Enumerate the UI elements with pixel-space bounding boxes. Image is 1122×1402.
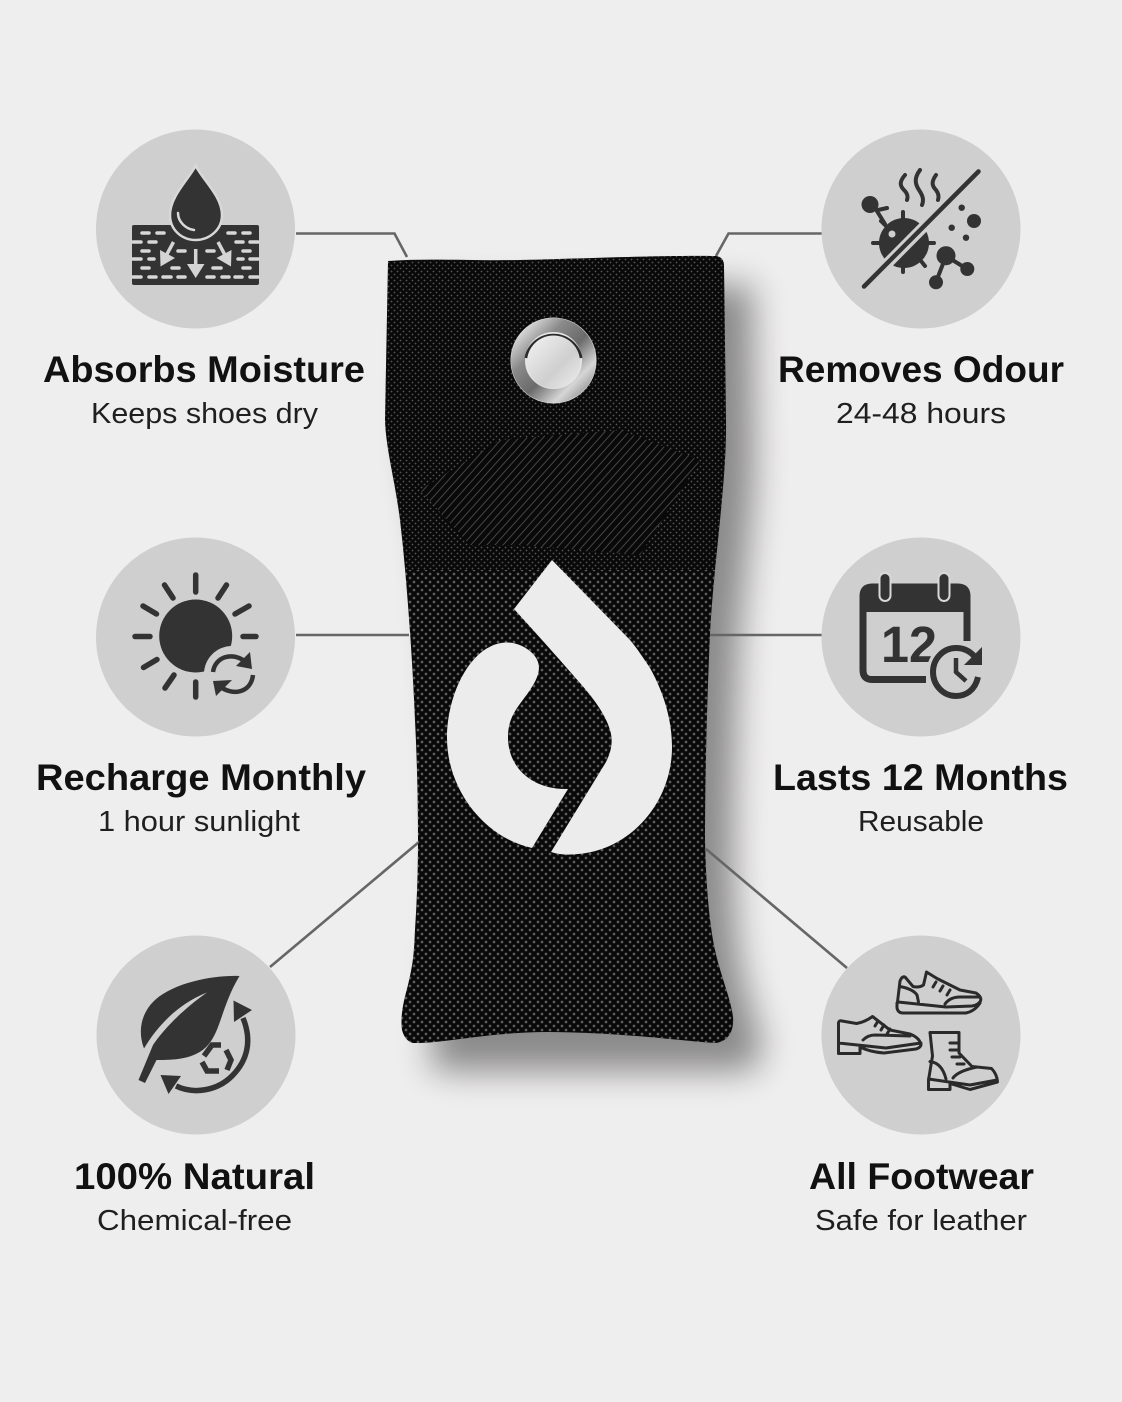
product: black charcoal bag (385, 256, 734, 1043)
icon circle (822, 936, 1020, 1134)
subtext: Reusable (858, 806, 984, 838)
connector: recharge monthly (296, 634, 409, 636)
subtext: Keeps shoes dry (91, 398, 319, 430)
heading: Removes Odour (778, 349, 1064, 390)
icon circle (96, 130, 295, 328)
panel: 100% natural (74, 936, 315, 1237)
icon: leaf with recycling loop (138, 976, 252, 1094)
heading: Recharge Monthly (36, 757, 366, 798)
icon circle (822, 130, 1020, 328)
product shadow (413, 285, 761, 1071)
bag fabric (385, 256, 734, 1043)
icon: water drop on bricks (132, 166, 259, 285)
subtext: Safe for leather (815, 1205, 1027, 1237)
icon: calendar with clock (860, 573, 987, 702)
icon circle (96, 936, 296, 1134)
heading: 100% Natural (74, 1156, 315, 1197)
heading: All Footwear (809, 1156, 1034, 1197)
connector: 100% natural (270, 842, 419, 967)
white drop logo (447, 560, 672, 855)
panel: lasts 12 months (773, 538, 1068, 838)
panel: absorbs moisture (43, 130, 365, 430)
subtext: 1 hour sunlight (98, 806, 300, 838)
panel: all footwear (809, 936, 1034, 1237)
sneaker (897, 972, 981, 1013)
recycling symbol (202, 1045, 231, 1071)
connector: all footwear (706, 849, 847, 968)
infographic canvas (38, 130, 1066, 1230)
boot (928, 1032, 998, 1090)
icon circle (822, 538, 1020, 736)
icon: three shoes (838, 972, 998, 1090)
icon circle (96, 538, 295, 736)
metal eyelet (510, 318, 596, 404)
connector: removes odour (716, 234, 822, 256)
panel: recharge monthly (36, 538, 366, 838)
icon: odour and bacteria crossed out (862, 170, 981, 289)
panel: removes odour (778, 130, 1064, 430)
connector: lasts 12 months (709, 634, 822, 636)
connector: absorbs moisture (296, 234, 407, 257)
subtext: Chemical-free (97, 1205, 292, 1237)
icon: calendar with clock: 12 (881, 616, 937, 673)
heading: Absorbs Moisture (43, 349, 365, 390)
subtext: 24-48 hours (836, 398, 1006, 430)
dress shoe (838, 1016, 921, 1054)
icon: sun with recharge arrows (135, 575, 260, 702)
heading: Lasts 12 Months (773, 757, 1068, 798)
